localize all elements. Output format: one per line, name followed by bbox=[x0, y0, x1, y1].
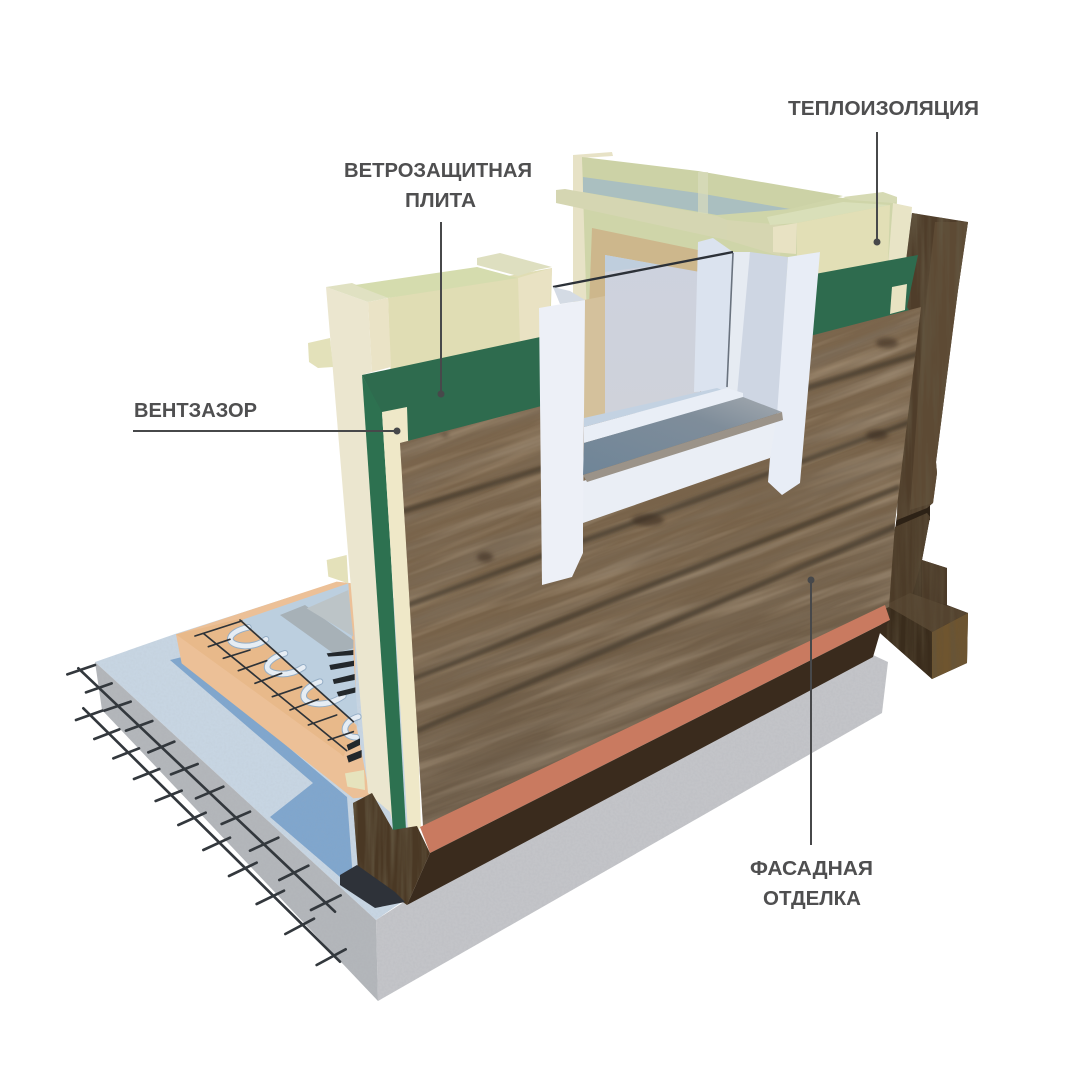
label: ventilation gap: ВЕНТЗАЗОР bbox=[134, 400, 257, 422]
timber sill, corner end block bbox=[880, 510, 970, 682]
label: windproof board: ПЛИТА bbox=[405, 190, 476, 212]
stud stub on the left bbox=[308, 338, 333, 368]
floor layers: peach insulation, screed, plates, heating pipes, rebar bbox=[176, 555, 370, 798]
foundation rebar bbox=[67, 665, 346, 965]
red flashing strip bbox=[420, 605, 890, 853]
label: facade finish: ОТДЕЛКА bbox=[763, 888, 861, 910]
stud ends bbox=[327, 555, 348, 583]
timber base beam bbox=[350, 620, 890, 908]
corner post, dark timber bbox=[895, 213, 968, 527]
label: windproof board bbox=[344, 160, 532, 212]
board seams bbox=[400, 353, 921, 732]
black waterproofing pad bbox=[340, 865, 405, 908]
label: facade finish: ФАСАДНАЯ bbox=[750, 858, 873, 880]
heating pipe loops bbox=[230, 627, 358, 737]
ventilation batten bbox=[382, 407, 421, 832]
right insulation block bbox=[727, 220, 783, 256]
metal window sill bbox=[583, 397, 783, 482]
white window trim bbox=[539, 252, 820, 585]
leader lines with dots bbox=[133, 132, 880, 845]
wood knots bbox=[442, 338, 898, 562]
label: facade finish bbox=[750, 858, 873, 910]
label: thermal insulation: ТЕПЛОИЗОЛЯЦИЯ bbox=[788, 98, 979, 120]
concrete foundation slab bbox=[95, 580, 890, 1005]
plate edges bbox=[327, 650, 362, 763]
facade cladding: wooden boards bbox=[400, 307, 921, 826]
back wall: insulation and battens bbox=[556, 152, 912, 420]
window opening: glass and frame bbox=[553, 238, 788, 443]
OSB board bbox=[585, 228, 698, 416]
floor rebar bbox=[195, 620, 353, 751]
right green wind barrier bbox=[808, 255, 918, 340]
green wind barrier plate bbox=[362, 336, 545, 832]
left wall: studs, insulation bbox=[308, 253, 552, 836]
label: windproof board: ВЕТРОЗАЩИТНАЯ bbox=[344, 160, 532, 182]
